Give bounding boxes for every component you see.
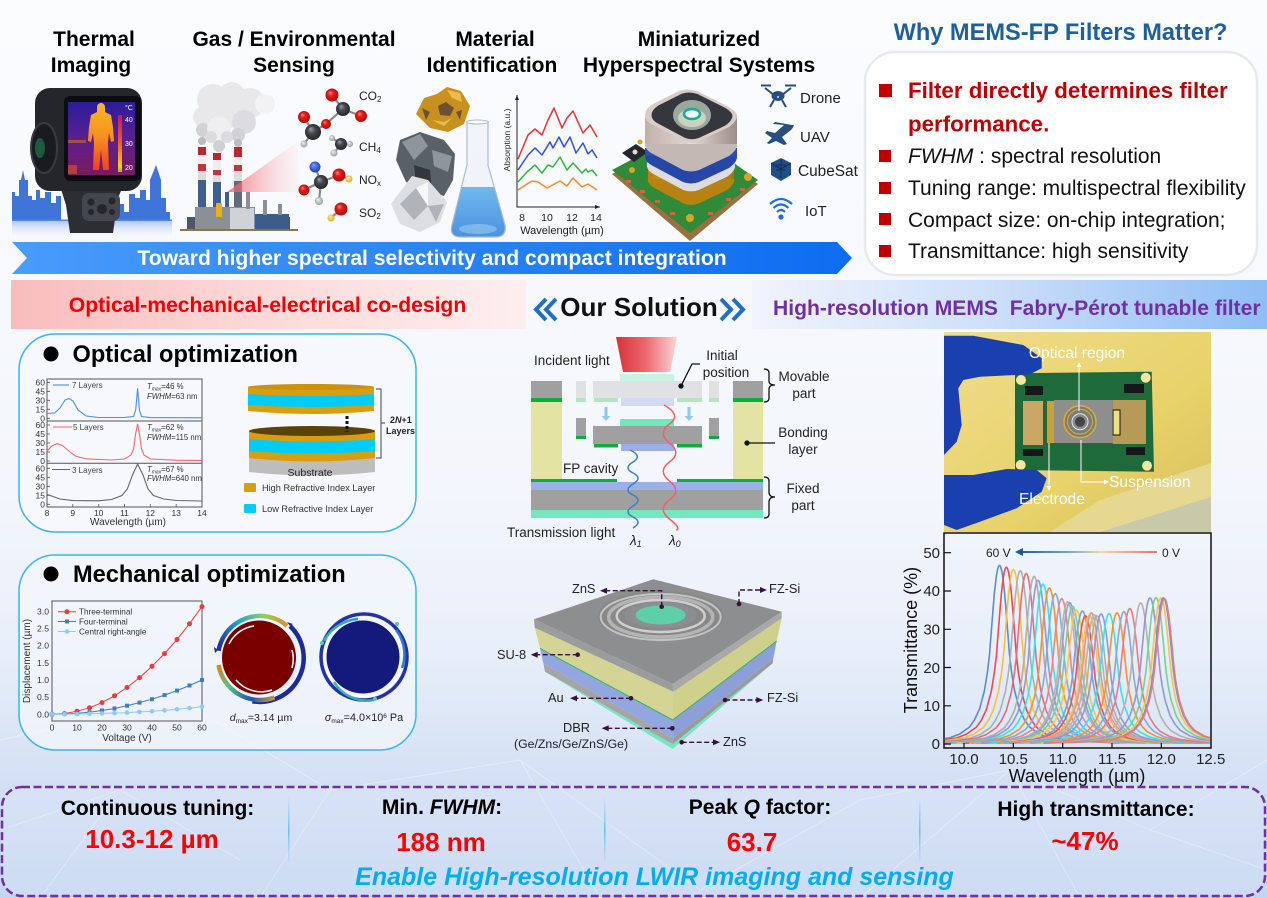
motion arrows <box>602 407 694 421</box>
chart: displacement versus voltage: 0 <box>50 722 55 732</box>
legend: refractive index layers <box>244 483 375 514</box>
photo annotations <box>1019 345 1190 508</box>
chart: displacement versus voltage: Central right-angle <box>79 628 147 636</box>
chart: transmittance versus wavelength: 10 <box>923 698 940 715</box>
bullet: key message: performance. <box>908 112 1049 136</box>
labels: Fixed <box>786 481 820 496</box>
chart: transmittance versus wavelength: 11.0 <box>1049 751 1077 768</box>
icon: drone <box>761 86 796 107</box>
bullet dot <box>44 346 58 362</box>
chart: transmittance versus wavelength: 12.5 <box>1196 751 1225 768</box>
chart: transmission versus wavelength for 7, 5, 3 layers: 5 Layers <box>73 423 104 432</box>
metric: continuous tuning: Continuous tuning: <box>61 797 254 820</box>
callouts <box>536 590 761 742</box>
diagram: layer stack 2N+1: Substrate <box>288 467 333 479</box>
chart: transmission versus wavelength for 7, 5, 3 layers: 0 <box>40 413 45 423</box>
diagram: 3D device structure: ZnS <box>572 581 595 596</box>
photo: packaged device held by gloved fingers <box>944 332 1211 532</box>
metric: minimum FWHM: Min. FWHM: <box>382 796 502 819</box>
band: co-design heading: Optical-mechanical-electrical co-design <box>69 294 466 317</box>
labels: λ <box>630 533 637 548</box>
metric: peak Q factor: Peak Q factor: <box>689 796 831 819</box>
labels: Incident light <box>534 353 610 368</box>
chart: transmission versus wavelength for 7, 5, 3 layers <box>36 377 207 528</box>
bonding layers <box>531 402 763 479</box>
simulation: stress ring: 6 <box>383 713 387 720</box>
label: drone: Drone <box>800 90 841 107</box>
diagram: FP cavity cross-section <box>507 337 830 549</box>
chart: transmittance versus wavelength: 10.5 <box>999 751 1028 768</box>
spring rings and optical window <box>598 591 724 641</box>
legend: refractive index layers: High Refractive Index Layer <box>262 483 375 493</box>
banner arrow <box>12 242 852 274</box>
label: IoT: IoT <box>805 203 827 220</box>
illustration: gas molecules: 2 <box>376 212 381 221</box>
incident light beam <box>616 337 677 372</box>
labels: layer <box>788 442 818 457</box>
chart: transmission versus wavelength for 7, 5, 3 layers: 15 <box>36 447 45 457</box>
band: tunable filter heading: High-resolution MEMS Fabry-Pérot tunable filter <box>773 297 1261 320</box>
wave: lambda 0 <box>663 405 678 530</box>
chart: transmission versus wavelength for 7, 5, 3 layers: FWHM=115 nm <box>147 433 201 442</box>
illustration: gas molecules: 2 <box>377 95 382 104</box>
illustration: gas molecules: 4 <box>376 146 381 155</box>
chart: transmission versus wavelength for 7, 5, 3 layers: max <box>152 428 162 434</box>
metric: peak Q factor <box>689 796 831 857</box>
chart: transmission versus wavelength for 7, 5, 3 layers: 7 Layers <box>72 381 103 390</box>
illustration: gas molecules <box>298 88 382 222</box>
chart: transmittance versus wavelength: 12.0 <box>1147 751 1176 768</box>
labels: 0 <box>676 539 681 549</box>
initial position ghost layers <box>576 374 719 406</box>
chart: absorption spectra: 10 <box>541 212 553 224</box>
panel: why it matters list <box>865 52 1257 275</box>
chart: displacement versus voltage: 40 <box>147 722 157 732</box>
chart: displacement versus voltage: 60 <box>197 722 207 732</box>
metric: minimum FWHM: 188 nm <box>396 827 486 857</box>
illustration: thermal camera over skyline: 40 <box>125 117 133 124</box>
labels: Bonding <box>778 425 828 440</box>
illustration: flask with blue liquid <box>451 120 505 237</box>
chart: displacement versus voltage: 3.0 <box>37 606 49 616</box>
chart: transmission versus wavelength for 7, 5, 3 layers: FWHM=63 nm <box>147 392 197 401</box>
heading: material identification: Material <box>455 28 535 51</box>
illustration: thermal camera over skyline <box>12 88 172 240</box>
chart: transmission versus wavelength for 7, 5, 3 layers: 3 Layers <box>72 466 103 475</box>
chart: transmission versus wavelength for 7, 5, 3 layers: 14 <box>197 508 207 518</box>
illustration: thermal camera over skyline: 20 <box>125 165 133 172</box>
chart: transmission versus wavelength for 7, 5, 3 layers: 12 <box>146 508 155 518</box>
section: application scenarios <box>12 28 859 274</box>
chart: transmittance versus wavelength: 40 <box>923 583 940 600</box>
bullet: key message <box>879 78 1228 136</box>
photo annotations: Suspension <box>1109 474 1190 491</box>
labels: position <box>703 365 749 380</box>
diagram: 3D device structure: (Ge/Zns/Ge/ZnS/Ge) <box>514 737 628 751</box>
chart: displacement versus voltage <box>22 601 207 744</box>
chart: transmittance versus wavelength: 30 <box>923 622 940 638</box>
diagram: 3D device structure: ZnS <box>723 734 746 749</box>
bullet dot <box>44 566 58 582</box>
chart: displacement versus voltage: Voltage (V) <box>102 733 152 744</box>
chart: transmission versus wavelength for 7, 5, 3 layers: 0 <box>40 456 45 466</box>
chart: displacement versus voltage: 50 <box>172 722 182 732</box>
chart: displacement versus voltage: 2.0 <box>37 641 49 651</box>
diagram: 3D device structure <box>497 579 800 751</box>
chart: absorption spectra: 8 <box>519 212 525 224</box>
legend: refractive index layers: Low Refractive Index Layer <box>262 504 373 514</box>
chart: displacement versus voltage: 10 <box>72 722 82 732</box>
heading: material identification: Identification <box>427 54 557 77</box>
tagline: Enable High-resolution LWIR imaging and sensing <box>355 863 954 891</box>
chart: absorption spectra: Absorption (a.u.) <box>502 108 512 171</box>
chart: transmittance versus wavelength: 10.0 <box>949 751 979 768</box>
fixed part <box>531 479 763 518</box>
chart: transmission versus wavelength for 7, 5, 3 layers: 9 <box>70 508 75 518</box>
metric: high transmittance: ~47% <box>1051 826 1119 856</box>
simulation: stress ring: =4.0×10 <box>344 712 383 724</box>
bullet: key message: Filter directly determines filter <box>908 78 1228 103</box>
chart: transmittance versus wavelength: 0 V <box>1162 546 1180 560</box>
chart: transmittance versus wavelength: 60 V <box>986 546 1011 560</box>
chart: transmittance versus wavelength: Wavelength (µm) <box>1009 766 1145 786</box>
bullet: FWHM: FWHM : spectral resolution <box>908 145 1161 168</box>
chart: transmission versus wavelength for 7, 5, 3 layers: Wavelength (µm) <box>90 517 166 528</box>
chart: transmission versus wavelength for 7, 5, 3 layers: 45 <box>36 429 45 439</box>
chart: transmittance versus wavelength: 20 <box>923 660 940 677</box>
heading: thermal imaging: Imaging <box>51 54 131 77</box>
diagram: layer stack 2N+1: 2 <box>390 415 395 425</box>
chart: transmission versus wavelength for 7, 5, 3 layers: max <box>152 386 162 392</box>
chart: displacement versus voltage: 0.0 <box>37 709 49 719</box>
labels: part <box>791 498 815 513</box>
diagram: 3D device structure: FZ-Si <box>767 690 798 705</box>
panel: mechanical optimization <box>19 555 416 750</box>
diagram: 3D device structure: SU-8 <box>497 647 526 662</box>
diagram: 3D device structure: Au <box>548 690 564 705</box>
diagram: 3D device structure: DBR <box>563 720 590 735</box>
labels: part <box>792 386 816 401</box>
chart: transmission versus wavelength for 7, 5, 3 layers: =62 % <box>161 423 184 432</box>
heading: our solution: Our Solution <box>560 292 718 322</box>
labels: 1 <box>637 539 642 549</box>
chart: transmission versus wavelength for 7, 5, 3 layers: 15 <box>36 404 45 414</box>
illustration: gas molecules: CO <box>359 89 377 103</box>
chart: transmission versus wavelength for 7, 5, 3 layers: =67 % <box>161 465 184 474</box>
chart: transmission versus wavelength for 7, 5, 3 layers: =46 % <box>161 382 184 391</box>
chart: transmission versus wavelength for 7, 5, 3 layers: 8 <box>45 508 50 518</box>
illustration: factory with smoke <box>180 82 300 231</box>
labels <box>507 348 830 549</box>
illustration: gas molecules: CH <box>359 140 376 154</box>
simulation: stress ring: σ <box>325 712 332 724</box>
panel: key performance metrics <box>2 787 1265 896</box>
chart: transmission versus wavelength for 7, 5, 3 layers: 30 <box>36 438 45 448</box>
banner arrow: Toward higher spectral selectivity and compact integration <box>137 247 727 270</box>
bullet: compact size: Compact size: on-chip integration; <box>908 209 1226 232</box>
chart: displacement versus voltage: 0.5 <box>37 692 49 702</box>
chart: transmission versus wavelength for 7, 5, 3 layers: 60 <box>36 420 45 430</box>
illustration: gas molecules: NO <box>359 173 377 187</box>
metric: peak Q factor: 63.7 <box>727 827 777 857</box>
chart: transmission versus wavelength for 7, 5, 3 layers: 13 <box>171 508 181 518</box>
chart: transmission versus wavelength for 7, 5, 3 layers: 10 <box>94 508 104 518</box>
chart: transmission versus wavelength for 7, 5, 3 layers: 11 <box>120 508 129 518</box>
chart: transmission versus wavelength for 7, 5, 3 layers: 45 <box>36 386 45 396</box>
bullet: tuning range: Tuning range: multispectral flexibility <box>908 177 1246 200</box>
leaders and braces <box>679 364 775 518</box>
diagram: layer stack 2N+1: Layers <box>386 426 415 436</box>
metric: continuous tuning: 10.3-12 µm <box>85 824 219 854</box>
chart: transmission versus wavelength for 7, 5, 3 layers: 30 <box>36 481 45 491</box>
panel: optical optimization <box>19 334 416 532</box>
bullet: transmittance: Transmittance: high sensitivity <box>908 240 1189 263</box>
labels: Initial <box>706 348 738 363</box>
chart: transmission versus wavelength for 7, 5, 3 layers: 0 <box>40 499 45 509</box>
chart: displacement versus voltage: Four-terminal <box>79 618 128 626</box>
illustration: mineral rocks <box>391 87 470 232</box>
icon: wifi <box>770 199 792 218</box>
simulation: stress ring: max <box>331 718 344 725</box>
label: CubeSat: CubeSat <box>798 163 859 180</box>
heading: gas environmental sensing: Sensing <box>253 54 335 77</box>
simulation: displacement ring: d <box>230 712 237 724</box>
band: tunable filter heading <box>752 280 1267 329</box>
chart: transmittance versus wavelength: 0 <box>932 736 940 753</box>
diagram: layer stack 2N+1: N+1 <box>395 415 412 425</box>
chart: transmission versus wavelength for 7, 5, 3 layers: 45 <box>36 472 45 482</box>
chart: displacement versus voltage: 1.5 <box>37 658 49 668</box>
metric: high transmittance <box>997 798 1195 856</box>
simulation: displacement ring: =3.14 µm <box>248 712 292 724</box>
label: UAV: UAV <box>800 129 830 146</box>
metric: minimum FWHM <box>382 796 502 857</box>
labels: FP cavity <box>563 461 619 476</box>
chart: absorption spectra: Wavelength (µm) <box>520 225 604 237</box>
illustration: thermal camera over skyline: °C <box>125 104 133 112</box>
chart: transmittance versus wavelength: 50 <box>923 545 940 562</box>
labels: Transmission light <box>507 525 616 540</box>
chart: transmittance versus wavelength: 11.5 <box>1098 751 1126 768</box>
simulation: stress ring: Pa <box>387 712 403 724</box>
chart: displacement versus voltage: 20 <box>97 722 107 732</box>
simulation: stress ring <box>320 614 407 725</box>
chart: transmission versus wavelength for 7, 5, 3 layers: 60 <box>36 377 45 387</box>
illustration: gas molecules: x <box>377 179 381 188</box>
chart: transmission versus wavelength for 7, 5, 3 layers: 30 <box>36 395 45 405</box>
chart: transmittance versus wavelength <box>904 532 1225 786</box>
illustration: thermal camera over skyline: 30 <box>125 141 133 148</box>
chart: transmission versus wavelength for 7, 5, 3 layers: max <box>152 470 162 476</box>
chart: transmission versus wavelength for 7, 5, 3 layers: 60 <box>36 463 45 473</box>
chart: transmission versus wavelength for 7, 5, 3 layers: 15 <box>36 490 45 500</box>
labels: Movable <box>778 369 830 384</box>
chart: displacement versus voltage: 2.5 <box>37 624 49 634</box>
illustration: gas molecules: SO <box>359 206 376 220</box>
chart: absorption spectra <box>502 95 604 237</box>
wave: lambda 1 <box>628 450 638 528</box>
heading: optical optimization: Optical optimization <box>72 342 298 368</box>
chart: displacement versus voltage: Three-terminal <box>79 608 132 616</box>
metric: continuous tuning <box>61 797 254 854</box>
chart: displacement versus voltage: 1.0 <box>37 675 49 685</box>
heading: gas environmental sensing: Gas / Environmental <box>192 28 396 51</box>
chart: displacement versus voltage: Displacement (µm) <box>22 619 33 703</box>
heading: thermal imaging: Thermal <box>53 28 135 51</box>
illustration: hyperspectral module on PCB <box>612 90 758 241</box>
diagram: 3D device structure: FZ-Si <box>769 581 800 596</box>
chart: absorption spectra: 12 <box>566 212 578 224</box>
labels: λ <box>669 533 676 548</box>
photo annotations: Electrode <box>1019 491 1085 508</box>
chart: transmission versus wavelength for 7, 5, 3 layers: T <box>147 465 153 474</box>
band: co-design heading <box>11 280 526 329</box>
simulation: displacement ring: max <box>236 718 249 725</box>
photo annotations: Optical region <box>1029 345 1125 362</box>
icon: CubeSat <box>771 158 791 181</box>
movable part <box>531 381 763 451</box>
chart: transmittance versus wavelength: Transmittance (%) <box>901 567 921 713</box>
chart: transmission versus wavelength for 7, 5, 3 layers: T <box>147 423 153 432</box>
chart: transmission versus wavelength for 7, 5, 3 layers: FWHM=640 nm <box>147 474 202 483</box>
diagram: layer stack 2N+1 <box>248 384 415 479</box>
heading: why MEMS-FP filters matter: Why MEMS-FP Filters Matter? <box>894 20 1227 46</box>
chart: absorption spectra: 14 <box>590 212 602 224</box>
heading: miniaturized hyperspectral systems: Miniaturized <box>638 28 760 51</box>
chart: transmission versus wavelength for 7, 5, 3 layers: T <box>147 382 153 391</box>
chart: displacement versus voltage: 30 <box>122 722 132 732</box>
icon: UAV plane <box>765 122 794 145</box>
heading: mechanical optimization: Mechanical optimization <box>73 562 346 588</box>
simulation: displacement ring <box>214 616 304 725</box>
metric: high transmittance: High transmittance: <box>997 798 1195 821</box>
heading: miniaturized hyperspectral systems: Hyperspectral Systems <box>583 54 815 77</box>
